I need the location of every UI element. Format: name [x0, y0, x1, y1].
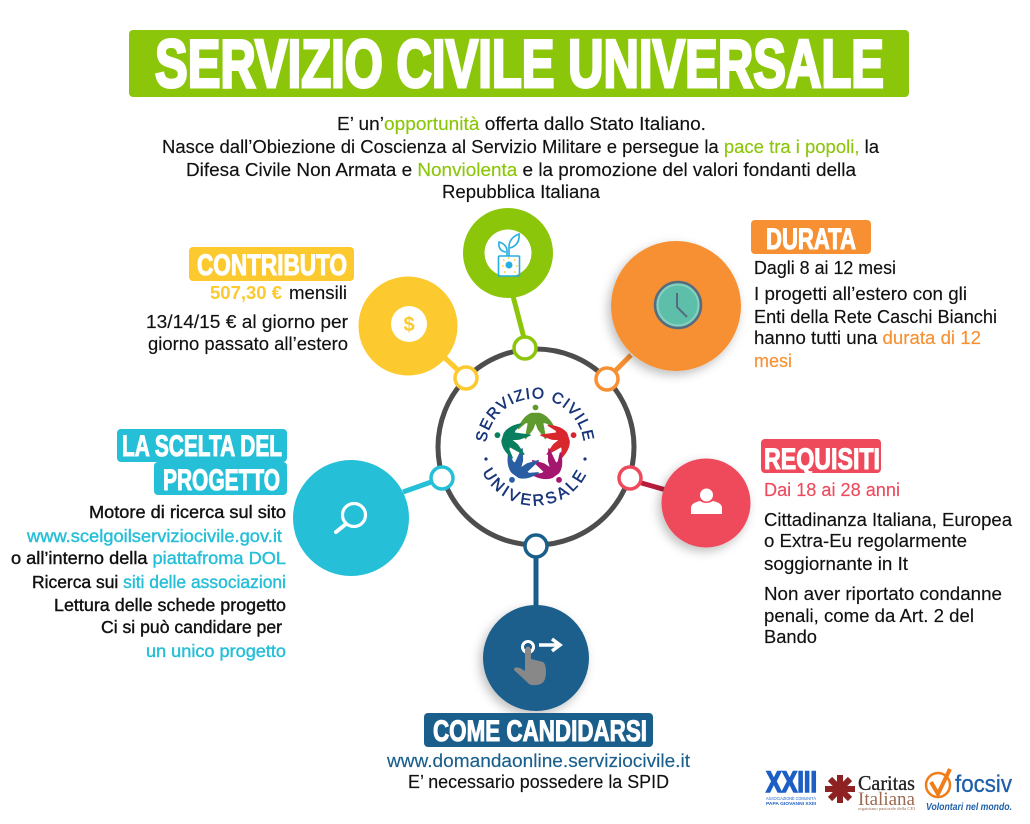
- connector: red: [638, 482, 666, 490]
- text: contributo: 13/14/15 € al giorno per: [146, 311, 348, 332]
- label: la scelta del progetto: PROGETTO: [163, 464, 280, 497]
- node: cyan: [431, 467, 453, 489]
- label: la scelta del progetto: [117, 429, 287, 497]
- logo: XXIII: ASSOCIAZIONE COMUNITÀ: [766, 795, 816, 801]
- intro text: Difesa Civile Non Armata e Nonviolenta e la promozione del valori fondanti della: [186, 159, 857, 180]
- panel: scelta circle: [293, 460, 409, 576]
- label: come candidarsi: COME CANDIDARSI: [433, 715, 647, 748]
- text: la scelta: Ci si può candidare per: [101, 617, 282, 637]
- icon: clock: [655, 282, 701, 328]
- text: la scelta: [11, 502, 286, 661]
- text: la scelta: Motore di ricerca sul sito: [89, 502, 286, 522]
- logo: focsiv: Volontari nel mondo.: [926, 802, 1012, 813]
- text: la scelta: un unico progetto: [146, 641, 286, 661]
- logo: Caritas Italiana: Italiana: [858, 789, 916, 810]
- icon: search: [336, 504, 366, 532]
- central ring: [438, 349, 634, 545]
- panel: candidarsi circle: [483, 605, 589, 711]
- node: green: [514, 337, 536, 359]
- icon: dollar: $: [403, 314, 415, 336]
- text: contributo: 507,30 €: [210, 283, 282, 303]
- text: requisiti: Non aver riportato condanne: [764, 583, 1002, 604]
- intro text: [162, 113, 880, 202]
- logo: XXIII: PAPA GIOVANNI XXIII: [766, 801, 816, 806]
- central logo: SERVIZIO CIVILE: [476, 388, 594, 442]
- panel: contributo circle: [358, 276, 458, 376]
- text: contributo: mensili: [289, 282, 347, 303]
- text: durata: I progetti all’estero con gli: [754, 283, 967, 304]
- text: la scelta: www.scelgoilserviziocivile.gov.it: [26, 526, 282, 546]
- text: durata: Enti della Rete Caschi Bianchi: [754, 306, 997, 327]
- label: durata: DURATA: [766, 223, 856, 256]
- central logo: [476, 388, 594, 506]
- text: requisiti: o Extra-Eu regolarmente: [764, 530, 967, 551]
- icon: hand and arrow: [514, 639, 560, 685]
- logo: Caritas Italiana: Caritas: [858, 771, 915, 795]
- text: requisiti: Dai 18 ai 28 anni: [764, 479, 900, 500]
- logo: XXIII: XXIII: [766, 766, 817, 799]
- node: blue: [525, 535, 547, 557]
- text: requisiti: penali, come da Art. 2 del: [764, 605, 974, 626]
- intro text: E’ un’opportunità offerta dallo Stato Italiano.: [337, 113, 706, 134]
- text: contributo: [146, 282, 348, 354]
- logo: XXIII: [766, 766, 817, 806]
- connector: blue: [534, 556, 538, 607]
- label: requisiti: REQUISITI: [764, 443, 880, 476]
- logo: focsiv: focsiv: [955, 771, 1012, 798]
- intro text: Nasce dall’Obiezione di Coscienza al Servizio Militare e persegue la pace tra i popoli, la: [162, 136, 880, 157]
- label: requisiti: [761, 439, 881, 476]
- connector: orange: [612, 355, 631, 374]
- panel: green plant circle: [463, 208, 553, 298]
- text: la scelta: Ricerca sui siti delle associazioni: [32, 572, 286, 592]
- connector: cyan: [403, 481, 434, 492]
- connector: yellow: [445, 358, 460, 372]
- text: la scelta: o all’interno della piattafroma DOL: [11, 548, 286, 568]
- icon: person: [691, 488, 722, 514]
- text: come candidarsi: [386, 750, 690, 792]
- text: durata: hanno tutti una durata di 12: [754, 327, 981, 348]
- text: requisiti: Bando: [764, 626, 817, 647]
- central logo: UNIVERSALE: [484, 467, 586, 506]
- icon: plant: [498, 234, 520, 276]
- intro text: Repubblica Italiana: [442, 181, 601, 202]
- node: yellow: [455, 367, 477, 389]
- text: contributo: giorno passato all’estero: [148, 333, 348, 354]
- text: come candidarsi: www.domandaonline.serviziocivile.it: [386, 750, 690, 771]
- text: come candidarsi: E’ necessario possedere la SPID: [408, 771, 669, 792]
- text: la scelta: Lettura delle schede progetto: [54, 595, 286, 615]
- panel: durata circle: [611, 241, 741, 371]
- text: durata: mesi: [754, 350, 792, 371]
- logo: Caritas Italiana: organismo pastorale della CEI: [858, 806, 916, 811]
- node: orange: [596, 368, 618, 390]
- text: durata: [754, 257, 997, 371]
- node: red: [619, 467, 641, 489]
- connector: green: [513, 296, 524, 338]
- text: requisiti: Cittadinanza Italiana, Europea: [764, 509, 1013, 530]
- logo: focsiv: [926, 769, 1012, 813]
- text: durata: Dagli 8 ai 12 mesi: [754, 257, 896, 278]
- text: requisiti: [764, 479, 1013, 647]
- panel: requisiti circle: [662, 458, 750, 548]
- label: contributo: CONTRIBUTO: [197, 249, 347, 282]
- logo: Caritas Italiana: [825, 771, 916, 811]
- text: requisiti: soggiornante in It: [764, 553, 908, 574]
- label: la scelta del progetto: LA SCELTA DEL: [122, 430, 282, 463]
